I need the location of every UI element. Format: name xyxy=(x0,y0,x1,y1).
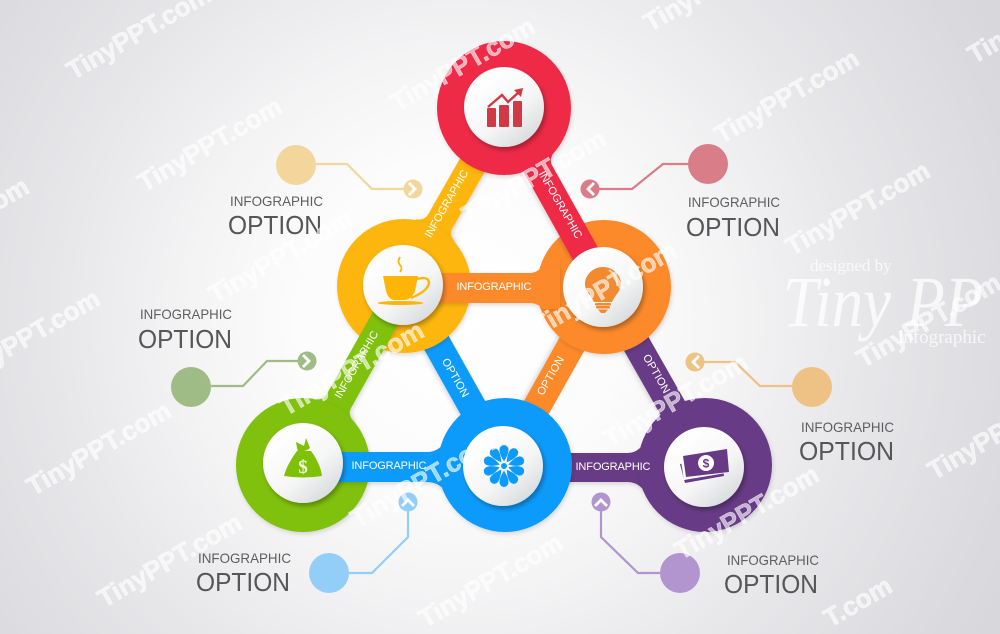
icon: coffee cup xyxy=(378,257,429,305)
callout: bottom left xyxy=(196,492,418,597)
connector labels: INFOGRAPHIC xyxy=(333,329,381,401)
icon: money bag: $ xyxy=(298,457,308,478)
white discs xyxy=(263,67,744,507)
watermark: TinyPPT.com repeated: TinyPPT.com xyxy=(669,459,824,566)
watermark: TinyPPT.com repeated: TinyPPT.com xyxy=(203,203,358,310)
node: green ring xyxy=(236,398,370,532)
watermark: TinyPPT.com repeated: T.com xyxy=(818,570,897,633)
watermark: TinyPPT.com repeated: TinyPPT.com xyxy=(413,527,568,634)
connector: green diagonal xyxy=(303,275,423,441)
connector labels: OPTION xyxy=(439,356,471,400)
watermark: TinyPPT.com repeated: TinyPPT.com xyxy=(598,347,753,454)
watermark: TinyPPT.com repeated: TinyPPT.com xyxy=(709,43,864,150)
icon: money bag xyxy=(284,438,322,478)
node: yellow ring xyxy=(337,219,471,353)
connector: blue diagonal xyxy=(392,278,517,471)
watermark: TinyPPT.com repeated: TinyPPT.com xyxy=(385,11,540,118)
connector: purple diagonal xyxy=(592,280,715,468)
connector: yellow diagonal xyxy=(405,97,524,261)
icon: banknotes: $ xyxy=(703,456,710,470)
watermark: designed by signature: designed by xyxy=(810,256,892,275)
icon: banknotes xyxy=(680,449,729,483)
callout: top left: INFOGRAPHIC xyxy=(230,193,323,209)
watermark: TinyPPT.com repeated: TinyPPT.com xyxy=(527,235,682,342)
watermark: TinyPPT.com repeated: TinyPPT.com xyxy=(780,155,935,262)
callout: bottom right: OPTION xyxy=(724,569,818,599)
callout: top right: INFOGRAPHIC xyxy=(688,194,780,210)
connector: red diagonal xyxy=(516,140,624,293)
callout: bottom left: INFOGRAPHIC xyxy=(198,550,291,566)
node: orange ring xyxy=(537,220,671,354)
watermark: TinyPPT.com repeated: TinyPPT.com xyxy=(92,507,247,614)
connector: purple horizontal xyxy=(500,445,670,489)
watermark: TinyPPT.com repeated: TinyPPT.com xyxy=(132,91,287,198)
callout: middle right: OPTION xyxy=(799,436,894,466)
callout: middle left: OPTION xyxy=(138,324,232,354)
connector: orange diagonal xyxy=(492,280,616,472)
callout: middle left: INFOGRAPHIC xyxy=(140,306,232,322)
node: blue ring xyxy=(438,398,572,532)
watermark: TinyPPT.com repeated: TinyPPT.com xyxy=(274,315,429,422)
callout: top left xyxy=(228,145,422,240)
connector: blue horizontal xyxy=(303,444,460,489)
callout: top left: OPTION xyxy=(228,210,322,240)
callout: bottom left: OPTION xyxy=(196,567,290,597)
node: red ring xyxy=(437,41,571,175)
icon: flower xyxy=(483,445,525,487)
node: purple ring xyxy=(638,398,772,532)
connector labels xyxy=(333,168,672,473)
icon: bar chart with arrow xyxy=(487,88,523,127)
watermark: TinyPPT.com repeated: TinyPPT.com xyxy=(345,427,500,534)
callout: top right xyxy=(580,144,780,242)
callout: middle right xyxy=(686,352,894,466)
callout: top right: OPTION xyxy=(686,212,780,242)
connector: orange horizontal xyxy=(403,265,560,309)
connector labels: INFOGRAPHIC xyxy=(576,461,651,473)
connector labels: INFOGRAPHIC xyxy=(456,281,532,293)
watermark: designed by signature: infographic xyxy=(898,327,986,348)
watermark: TinyPPT.com repeated: TinyPPT.com xyxy=(456,123,611,230)
callout: bottom right: INFOGRAPHIC xyxy=(727,552,819,568)
connector labels: INFOGRAPHIC xyxy=(536,169,584,241)
connector labels: OPTION xyxy=(640,352,672,396)
icon: light bulb xyxy=(585,267,621,313)
callout: middle right: INFOGRAPHIC xyxy=(801,419,894,435)
watermark: TinyPPT.com repeated: TinyPPT.com xyxy=(21,395,176,502)
connector labels: OPTION xyxy=(535,354,567,398)
callout: bottom right xyxy=(592,492,819,599)
callout: middle left xyxy=(138,306,316,407)
connector labels: INFOGRAPHIC xyxy=(352,460,427,472)
connector labels: INFOGRAPHIC xyxy=(423,168,471,240)
